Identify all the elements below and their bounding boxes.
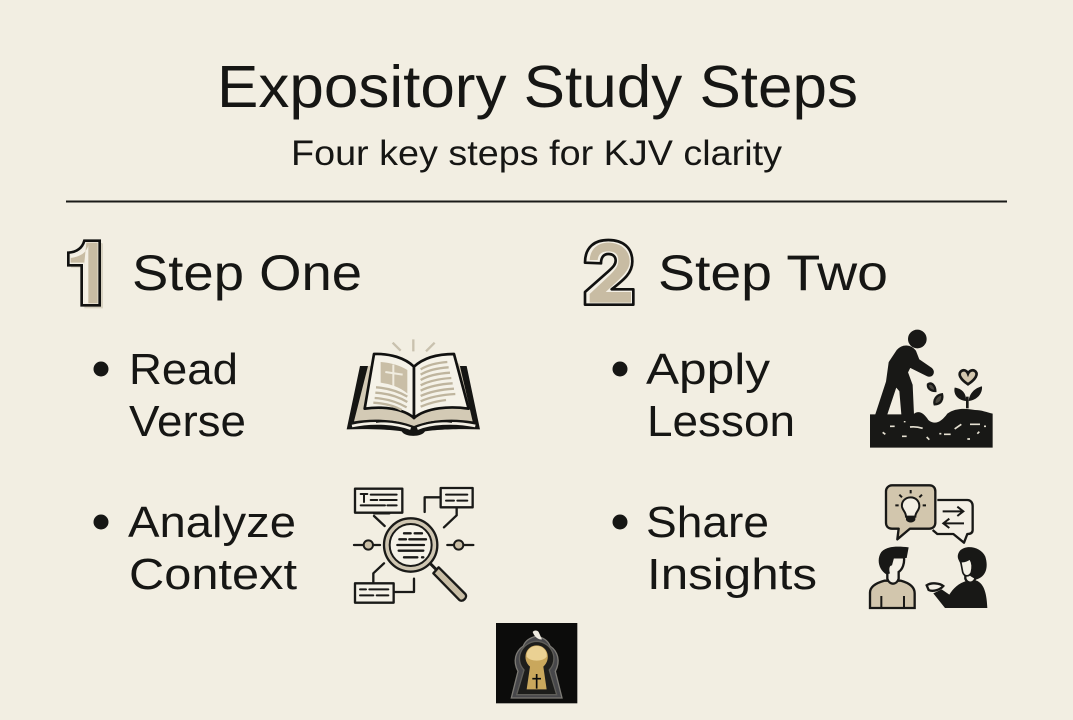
bullet: analyze context: Context [129, 550, 297, 599]
heading: step one: Step One [132, 245, 362, 301]
bullet: read verse [94, 345, 246, 446]
bullet: analyze context: Analyze [128, 498, 296, 547]
icon: person planting seeds [870, 330, 993, 448]
icon: magnifying glass with notes [354, 488, 473, 603]
bullet: share insights: Share [646, 498, 769, 547]
icon: number 1 [68, 241, 103, 308]
icon: open book [347, 339, 480, 436]
title: Expository Study Steps [217, 54, 858, 120]
bullet: share insights [612, 498, 817, 599]
bullet: share insights: Insights [647, 550, 817, 599]
bullet: apply lesson: Apply [646, 345, 770, 394]
panel: step one [68, 241, 480, 603]
heading: step two: Step Two [658, 245, 888, 301]
bullet: read verse: Read [129, 345, 238, 394]
panel: step two [585, 240, 993, 608]
bullet: analyze context [94, 498, 297, 599]
bullet: apply lesson: Lesson [647, 397, 795, 446]
bullet: read verse: Verse [129, 397, 246, 446]
bullet: apply lesson [612, 345, 795, 446]
icon: number 2 [585, 240, 635, 306]
icon: two people sharing ideas [870, 485, 987, 608]
logo: keyhole emblem [496, 623, 577, 703]
subtitle: Four key steps for KJV clarity [291, 134, 783, 173]
